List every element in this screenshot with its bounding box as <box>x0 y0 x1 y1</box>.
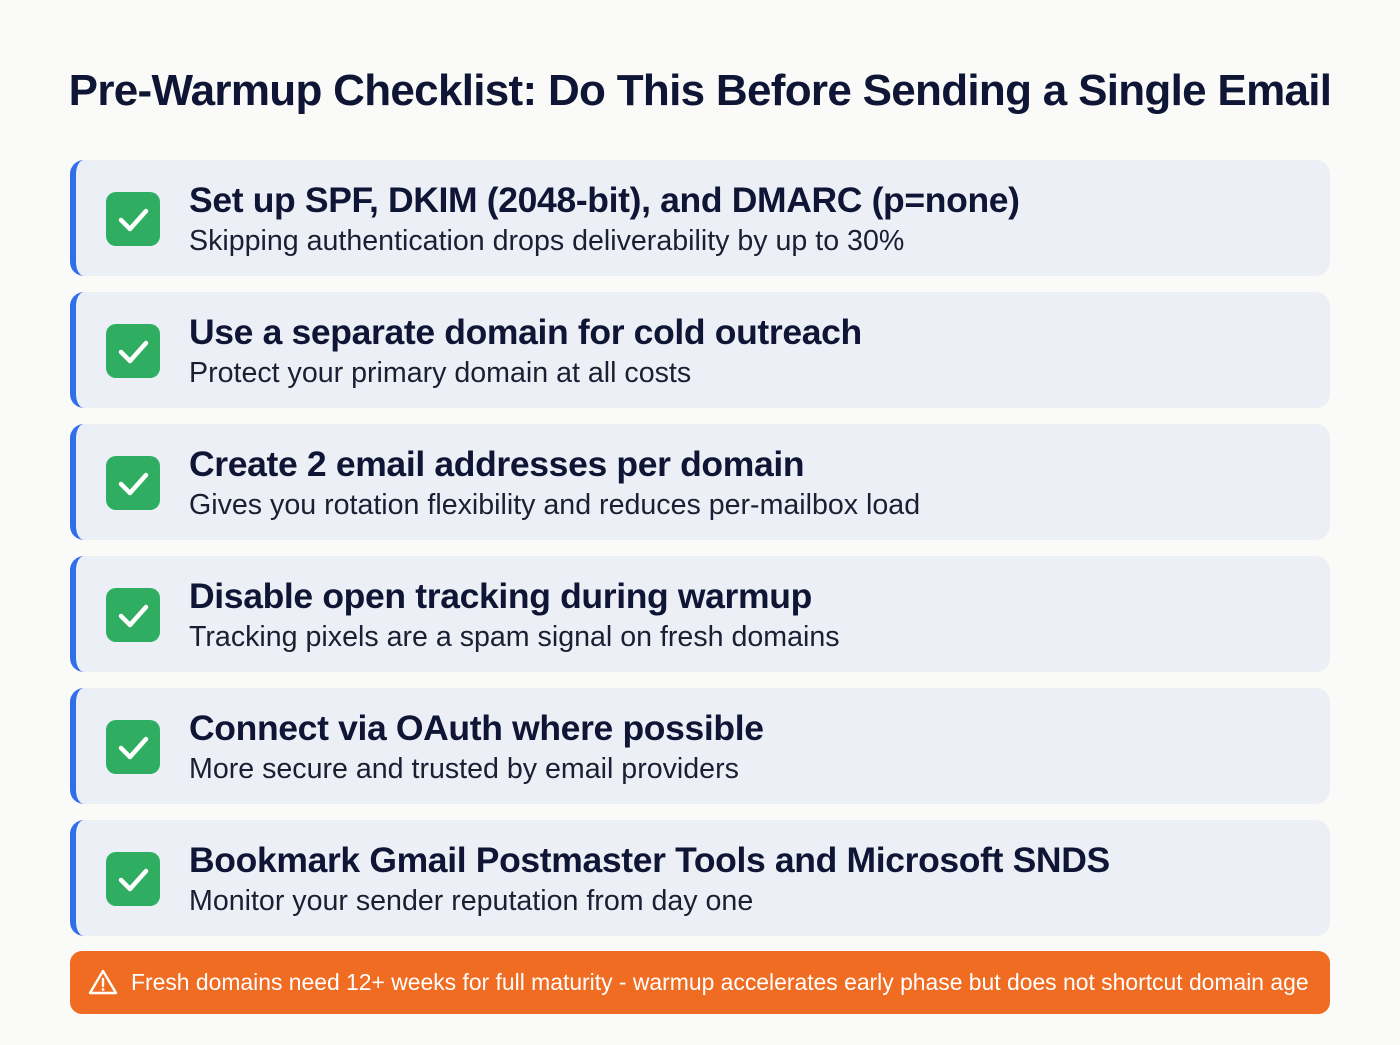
text: Gives you rotation flexibility and reduces per-mailbox load <box>189 489 920 521</box>
heading: Disable open tracking during warmup <box>189 576 812 616</box>
card 6 <box>70 820 1330 936</box>
heading: Create 2 email addresses per domain <box>189 444 804 484</box>
icon: check <box>106 324 160 378</box>
icon: warning <box>88 970 118 994</box>
icon: check <box>106 852 160 906</box>
text: More secure and trusted by email providers <box>189 753 739 785</box>
text: Monitor your sender reputation from day one <box>189 885 753 917</box>
text: Skipping authentication drops deliverability by up to 30% <box>189 225 904 257</box>
text: Protect your primary domain at all costs <box>189 357 691 389</box>
heading: Use a separate domain for cold outreach <box>189 312 862 352</box>
icon: check <box>106 456 160 510</box>
icon: check <box>106 192 160 246</box>
card 3 <box>70 424 1330 540</box>
text: Tracking pixels are a spam signal on fresh domains <box>189 621 840 653</box>
card 5 <box>70 688 1330 804</box>
heading: Set up SPF, DKIM (2048-bit), and DMARC (p=none) <box>189 180 1020 220</box>
warning banner <box>70 951 1330 1014</box>
card 2 <box>70 292 1330 408</box>
icon: check <box>106 588 160 642</box>
icon: check <box>106 720 160 774</box>
card 1 <box>70 160 1330 276</box>
heading: Connect via OAuth where possible <box>189 708 764 748</box>
title: Pre-Warmup Checklist: Do This Before Sending a Single Email <box>69 66 1331 115</box>
card 4 <box>70 556 1330 672</box>
heading: Bookmark Gmail Postmaster Tools and Microsoft SNDS <box>189 840 1110 880</box>
warning banner: Fresh domains need 12+ weeks for full maturity - warmup accelerates early phase but does not shortcut domain age <box>131 969 1309 995</box>
